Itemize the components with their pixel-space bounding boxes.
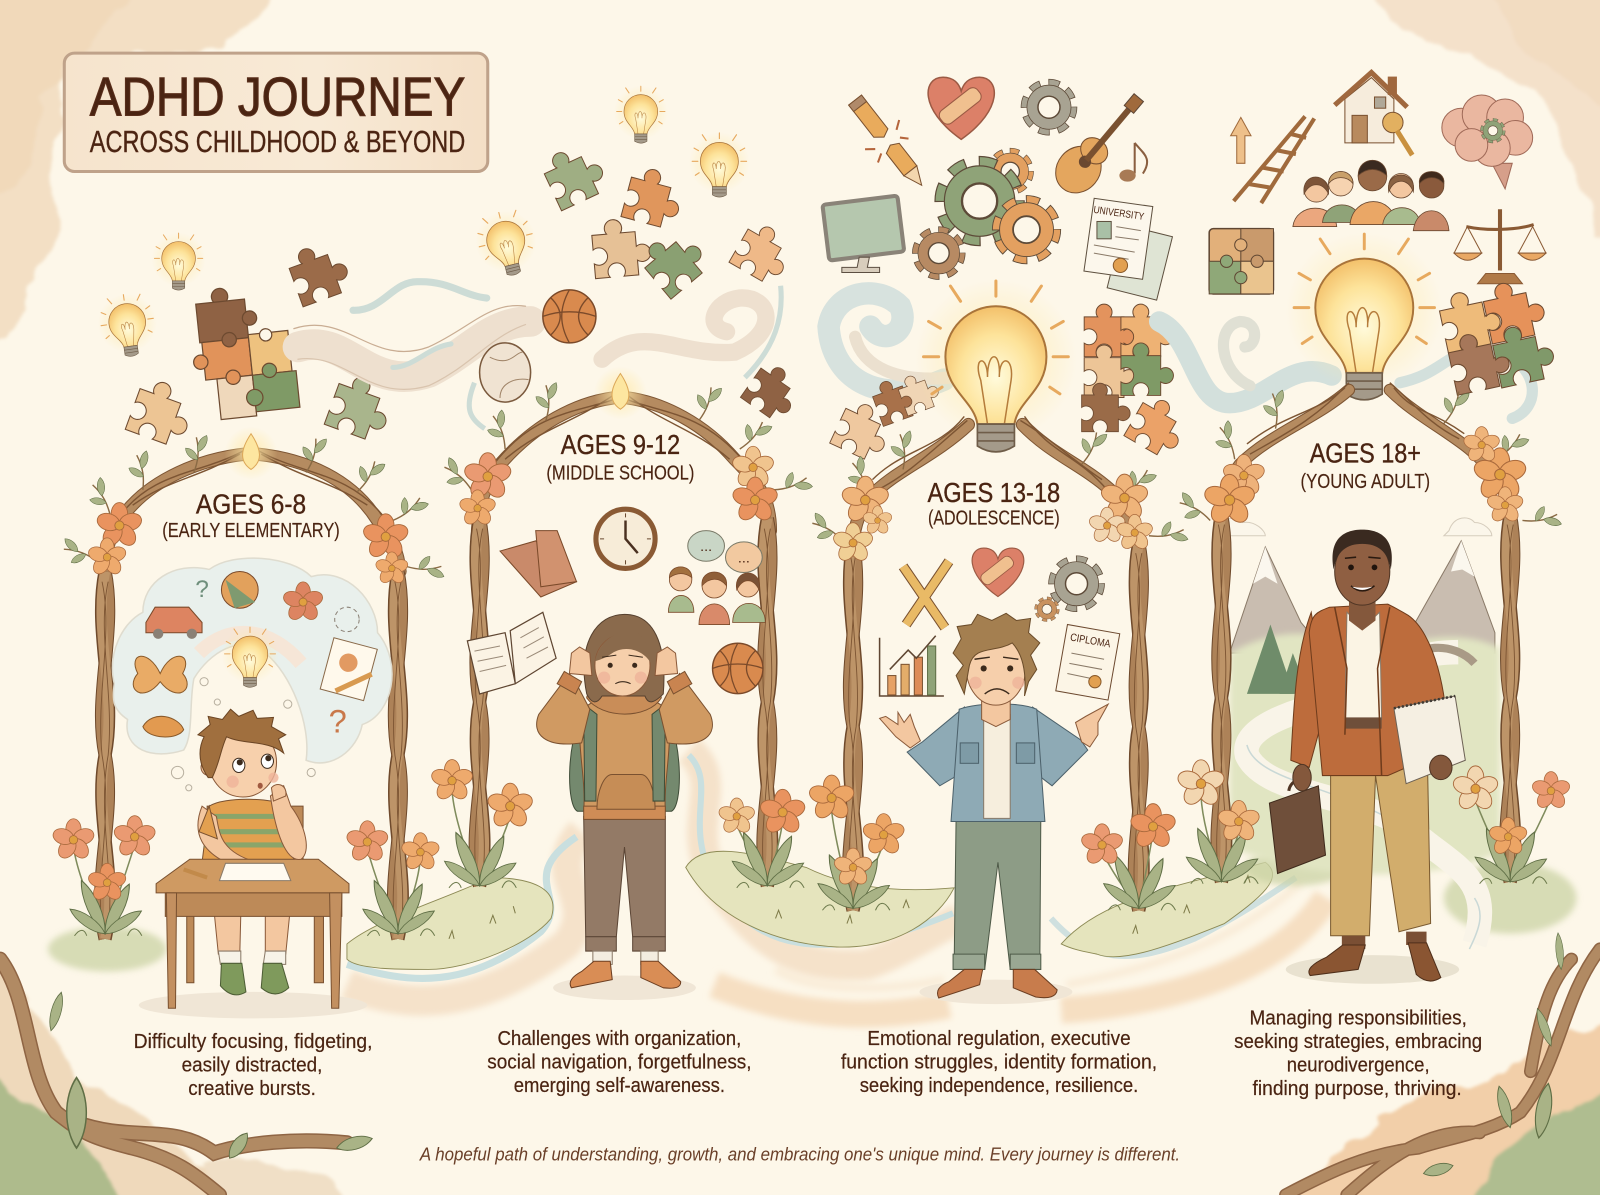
boy at desk [139,709,367,1018]
panel: ages 6-8 arch [51,427,447,939]
description: ages 18+: finding purpose, thriving. [1253,1078,1462,1100]
heading: ages 18+: AGES 18+ [1310,437,1421,468]
thought cloud with distractions: ? [329,703,347,740]
description: ages 9-12: Challenges with organization, [497,1028,741,1050]
title plaque [64,53,488,171]
blue spiral wave ages 13-18 [829,293,949,391]
description: ages 6-8 [134,1031,372,1100]
panel: ages 9-12 arch [430,366,816,890]
heading: ages 9-12 [546,429,694,485]
river and sand path [347,750,1327,1014]
description: ages 18+: seeking strategies, embracing [1234,1031,1482,1053]
heading: ages 13-18: (ADOLESCENCE) [928,508,1060,530]
distraction icons: book, clock, friends, planner, ball: ... [700,539,712,555]
panel: ages 13-18 arch [805,416,1191,913]
heading: ages 9-12: (MIDDLE SCHOOL) [546,463,694,485]
river water [347,755,1296,978]
title plaque: ADHD JOURNEY [90,65,465,127]
description: ages 6-8: creative bursts. [188,1078,316,1100]
description: ages 13-18: Emotional regulation, executive [867,1028,1131,1050]
description: ages 13-18: seeking independence, resilience. [860,1075,1138,1097]
title plaque: ACROSS CHILDHOOD & BEYOND [90,125,465,159]
description: ages 9-12: social navigation, forgetfulness, [487,1051,752,1073]
heading: ages 6-8: (EARLY ELEMENTARY) [162,520,340,542]
watercolor wash: bottom corners [0,924,1600,1195]
panel: icons ages 18+ [1209,72,1558,400]
frustrated teen in denim jacket [880,613,1108,1004]
thought cloud with distractions: ? [195,576,209,603]
description: ages 18+: Managing responsibilities, [1249,1008,1467,1030]
panel: icons ages 13-18: UNIVERSITY [1093,205,1145,223]
ground wash under arches [48,849,1577,971]
description: ages 18+ [1234,1008,1482,1100]
distraction icons: book, clock, friends, planner, ball: ... [738,550,750,566]
heading: ages 13-18 [928,477,1060,530]
panel: ages 18+ arch [1172,383,1572,886]
watercolor wash: top right [1327,0,1600,235]
footer tagline: A hopeful path of understanding, growth, and embracing one's unique mind. Every journey is different. [419,1143,1180,1164]
description: ages 6-8: easily distracted, [182,1054,322,1076]
inner icons: pencils, heart, gear, chart, diploma: CIPLOMA [1069,632,1112,651]
panel: icons ages 13-18 [822,77,1193,464]
description: ages 9-12: emerging self-awareness. [514,1075,725,1097]
panel: floating icons ages 9-12 [469,86,806,429]
heading: ages 6-8 [162,488,340,542]
heading: ages 13-18: AGES 13-18 [928,477,1060,508]
watercolor wash: top left [0,0,291,357]
description: ages 13-18: function struggles, identity formation, [841,1051,1157,1073]
description: ages 13-18 [841,1028,1157,1097]
worried teen with hoodie [537,614,712,1000]
description: ages 18+: neurodivergence, [1287,1054,1430,1076]
bottom-left tree and roots [0,959,374,1195]
heading: ages 18+ [1301,437,1430,493]
heading: ages 9-12: AGES 9-12 [561,429,680,460]
ribbon waves ages 18+ [1159,321,1532,418]
ribbon waves between ages 6-8 and 9-12 [294,282,531,389]
panel: floating icons ages 6-8 [94,233,398,449]
confident young adult with briefcase and notebook [1269,530,1465,984]
distraction icons: book, clock, friends, planner, ball [467,509,765,694]
heading: ages 6-8: AGES 6-8 [196,488,306,519]
grass tufts [449,876,1250,939]
description: ages 6-8: Difficulty focusing, fidgeting, [134,1031,372,1053]
thought cloud with distractions [113,558,392,791]
inner icons: pencils, heart, gear, chart, diploma [880,548,1120,700]
bottom-right tree and roots [1286,933,1600,1195]
grassy islands [347,851,1273,969]
panel: ages 18+ landscape [1214,518,1500,949]
heading: ages 18+: (YOUNG ADULT) [1301,471,1430,493]
description: ages 9-12 [487,1028,752,1097]
